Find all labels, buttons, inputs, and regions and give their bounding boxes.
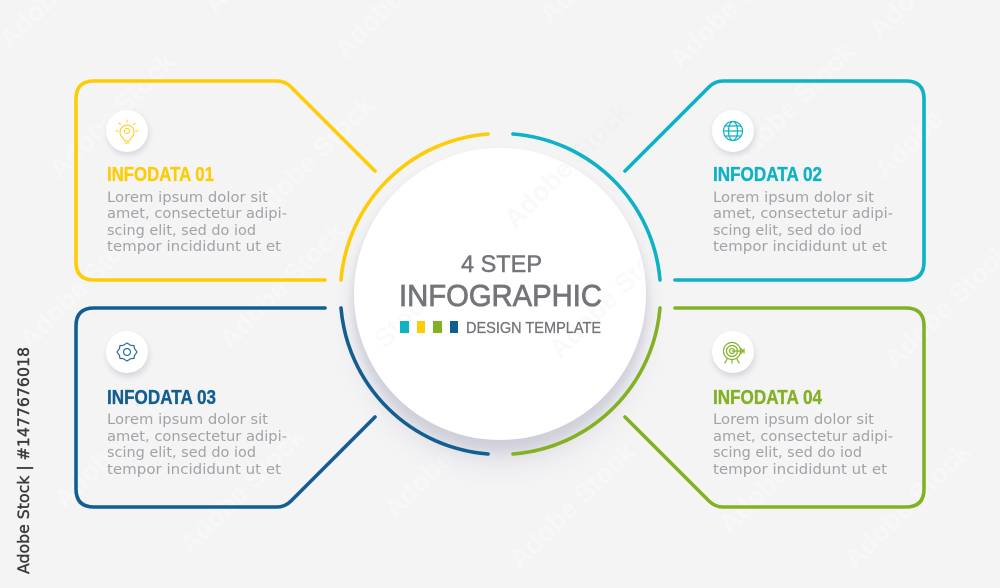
panel text: infodata 02: scing elit, sed do iod <box>713 223 862 239</box>
icon: target <box>712 331 755 377</box>
text: Adobe Stock <box>43 46 182 184</box>
center circle watermark: Stock <box>368 280 442 354</box>
panel text: infodata 02: tempor incididunt ut et <box>713 239 888 255</box>
panel outline: infodata 01 <box>76 81 375 280</box>
panel text: infodata 03: scing elit, sed do iod <box>107 445 256 461</box>
panel text: infodata 01 <box>107 164 287 255</box>
panel outline: infodata 03 <box>76 308 375 507</box>
panel text: infodata 02: INFODATA 02 <box>713 164 822 186</box>
panel text: infodata 01: tempor incididunt ut et <box>107 239 282 255</box>
panel outline: infodata 02 <box>625 81 924 280</box>
text: Adobe Stock <box>213 216 352 354</box>
center circle watermark <box>368 96 682 364</box>
center title: 4 STEP <box>461 251 542 278</box>
text: Adobe Stock <box>173 421 312 559</box>
panel text: infodata 03: Lorem ipsum dolor sit <box>107 412 269 428</box>
stock id label: Adobe Stock | #1477676018 <box>14 347 33 574</box>
center circle watermark: Adobe Stock <box>543 226 682 364</box>
panel text: infodata 04: tempor incididunt ut et <box>713 462 888 478</box>
panel text: infodata 01: Lorem ipsum dolor sit <box>107 190 269 206</box>
panel text: infodata 04: scing elit, sed do iod <box>713 445 862 461</box>
center title: INFOGRAPHIC <box>399 278 602 313</box>
arc: green <box>513 308 660 454</box>
panel text: infodata 02 <box>713 164 893 255</box>
panel text: infodata 04: INFODATA 04 <box>713 387 823 409</box>
panel text: infodata 04: amet, consectetur adipi- <box>713 429 893 445</box>
panel text: infodata 03 <box>107 387 287 478</box>
text: Adobe Stock <box>713 401 852 539</box>
center title <box>399 251 602 337</box>
text: Adobe Stock <box>242 90 381 228</box>
panel text: infodata 04 <box>713 387 893 478</box>
icon: gear <box>106 331 149 377</box>
arc: teal <box>513 134 660 280</box>
center white circle <box>354 148 646 440</box>
panel text: infodata 01: scing elit, sed do iod <box>107 223 256 239</box>
text: Adobe <box>868 104 949 184</box>
text: Adobe Stock <box>503 436 642 574</box>
text: Adobe Stock <box>48 376 187 514</box>
center title: DESIGN TEMPLATE <box>466 320 601 337</box>
panel text: infodata 02: amet, consectetur adipi- <box>713 206 893 222</box>
text: Adobe Stock <box>13 216 152 354</box>
panel text: infodata 03: INFODATA 03 <box>107 387 216 409</box>
panel outline: infodata 04 <box>625 308 924 507</box>
panel text: infodata 01: INFODATA 01 <box>107 164 214 186</box>
panel text: infodata 04: Lorem ipsum dolor sit <box>713 412 875 428</box>
center circle drop shadow <box>353 156 647 460</box>
panel text: infodata 01: amet, consectetur adipi- <box>107 206 287 222</box>
arc: blue <box>341 308 488 454</box>
panel text: infodata 02: Lorem ipsum dolor sit <box>713 190 875 206</box>
icon: globe <box>712 110 755 155</box>
arc: yellow <box>341 134 488 280</box>
center circle watermark: Adobe Stock <box>498 96 637 234</box>
legend squares <box>400 321 458 333</box>
text: Adobe Stock <box>723 36 862 174</box>
panel text: infodata 03: tempor incididunt ut et <box>107 462 282 478</box>
text: Adobe Stock <box>838 436 977 574</box>
text: Adobe Stock <box>378 386 517 524</box>
panel text: infodata 03: amet, consectetur adipi- <box>107 429 287 445</box>
icon: light bulb <box>106 110 149 155</box>
